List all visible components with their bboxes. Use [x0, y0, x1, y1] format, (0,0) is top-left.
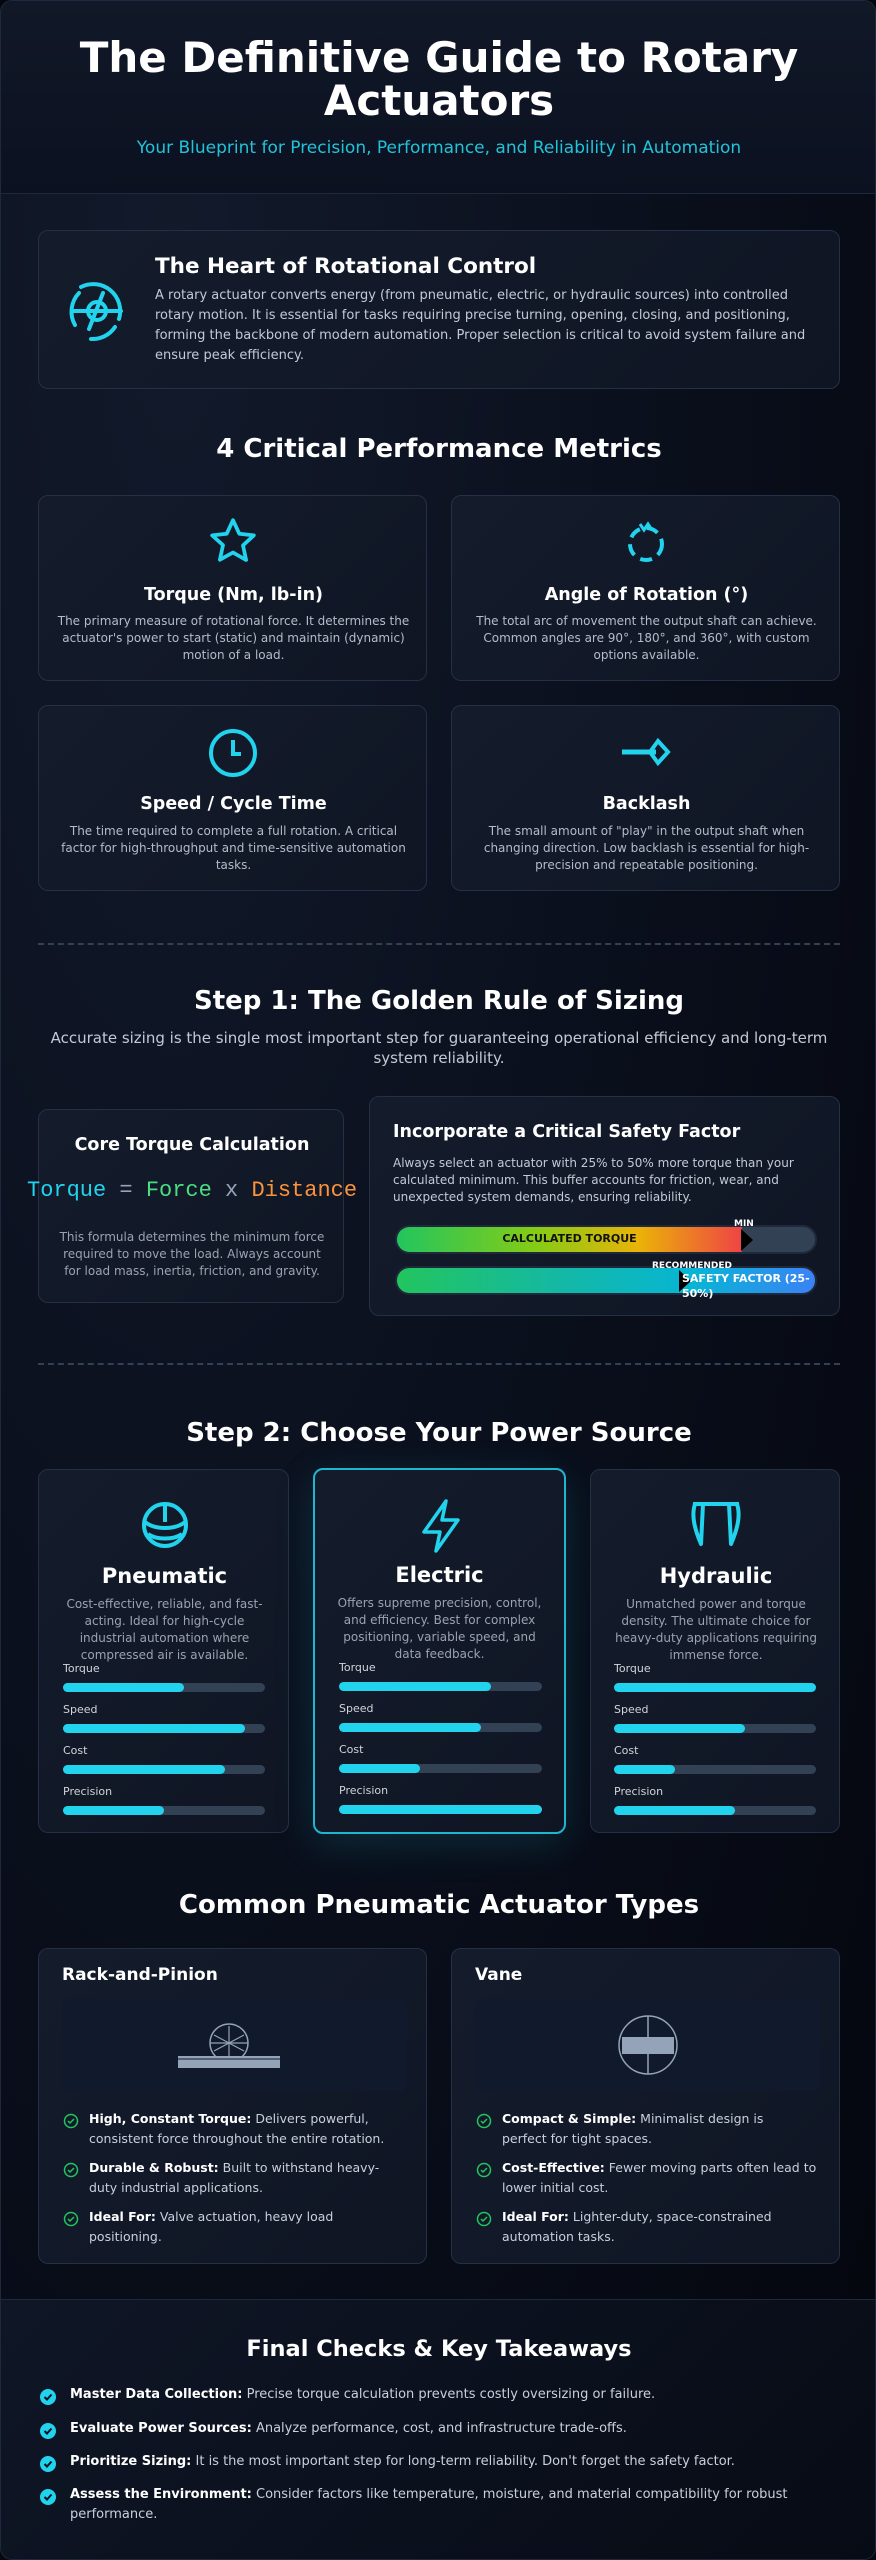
- ratings: Speed: [614, 1703, 648, 1716]
- title: Torque (Nm, lb-in): [144, 585, 323, 605]
- power card: pneumatic: [38, 1469, 289, 1833]
- description: The small amount of "play" in the output shaft when changing direction. Low backlash is essential for high-precision and repeatable positioning.: [484, 824, 809, 872]
- takeaways list: Assess the Environment: Consider factors like temperature, moisture, and material compatibility for robust performance.: [70, 2487, 788, 2522]
- description: Always select an actuator with 25% to 50% more torque than your calculated minimum. This buffer accounts for friction, wear, and unexpected system demands, ensuring reliability.: [393, 1156, 794, 1204]
- icon: clock: [209, 729, 257, 777]
- benefits list: [64, 2111, 384, 2244]
- title: Core Torque Calculation: [75, 1135, 309, 1155]
- benefits list: High, Constant Torque: Delivers powerful, consistent force throughout the entire rotation.: [89, 2111, 384, 2146]
- ratings: Precision: [63, 1785, 112, 1798]
- heading: metrics: 4 Critical Performance Metrics: [216, 434, 662, 464]
- bar: calculated torque: CALCULATED TORQUE: [502, 1232, 637, 1245]
- ratings: Cost: [614, 1744, 638, 1757]
- description: The primary measure of rotational force. It determines the actuator's power to start (static) and maintain (dynamic) motion of a load.: [58, 614, 409, 662]
- ratings: Torque: [63, 1662, 100, 1675]
- diagram: rack and pinion: [62, 1999, 407, 2091]
- ratings: Cost: [339, 1743, 363, 1756]
- description: The total arc of movement the output shaft can achieve. Common angles are 90°, 180°, and 360°, with custom options available.: [476, 614, 817, 662]
- description: This formula determines the minimum force required to move the load. Always account for load mass, inertia, friction, and gravity.: [60, 1230, 324, 1278]
- benefits list: Ideal For: Valve actuation, heavy load positioning.: [89, 2209, 333, 2244]
- title: The Definitive Guide to Rotary: [80, 33, 798, 82]
- heading: step 1: Step 1: The Golden Rule of Sizing: [194, 986, 684, 1016]
- heading: Final Checks & Key Takeaways: [246, 2336, 632, 2362]
- icon: rotation: [628, 521, 664, 562]
- takeaways list: Master Data Collection: Precise torque calculation prevents costly oversizing or failure.: [70, 2387, 655, 2402]
- title: Backlash: [603, 794, 690, 814]
- bar: safety factor: RECOMMENDED: [652, 1261, 732, 1271]
- intro text: A rotary actuator converts energy (from pneumatic, electric, or hydraulic sources) into controlled rotary motion. It is essential for tasks requiring precise turning, opening, closing, and positioning, forming the backbone of modern automation. Proper selection is critical to avoid system failure and ensure peak efficiency.: [155, 288, 805, 363]
- benefits list: Compact & Simple: Minimalist design is perfect for tight spaces.: [502, 2111, 763, 2146]
- title: Speed / Cycle Time: [140, 794, 327, 814]
- bar: calculated torque: [395, 1225, 817, 1254]
- step 1 description: Accurate sizing is the single most important step for guaranteeing operational efficiency and long-term system reliability.: [51, 1029, 827, 1067]
- icon: lightning: [422, 1499, 460, 1553]
- ratings: Speed: [339, 1702, 373, 1715]
- title: Hydraulic: [660, 1564, 772, 1588]
- icon: backlash: [622, 738, 671, 766]
- heading: pneumatic types: Common Pneumatic Actuator Types: [179, 1890, 699, 1920]
- icon: pneumatic: [142, 1502, 188, 1548]
- takeaways list: [40, 2387, 788, 2522]
- subtitle: Your Blueprint for Precision, Performance, and Reliability in Automation: [137, 138, 741, 158]
- metric card: torque: [38, 495, 427, 681]
- description: Cost-effective, reliable, and fast-acting. Ideal for high-cycle industrial automation where compressed air is available.: [66, 1597, 263, 1662]
- ratings: [338, 1661, 542, 1814]
- ratings: [62, 1662, 265, 1815]
- ratings: [614, 1662, 816, 1815]
- ratings: Speed: [63, 1703, 97, 1716]
- description: Unmatched power and torque density. The ultimate choice for heavy-duty applications requiring immense force.: [615, 1597, 817, 1662]
- title: [80, 33, 798, 125]
- ratings: Torque: [339, 1661, 376, 1674]
- metric card: angle: [451, 495, 840, 681]
- type card: rack and pinion: [38, 1948, 427, 2264]
- title: Rack-and-Pinion: [62, 1965, 218, 1985]
- title: Incorporate a Critical Safety Factor: [393, 1122, 740, 1142]
- heading: step 2: Step 2: Choose Your Power Source: [186, 1418, 692, 1448]
- benefits list: Durable & Robust: Built to withstand heavy-duty industrial applications.: [89, 2160, 379, 2195]
- title: Angle of Rotation (°): [545, 585, 748, 605]
- takeaways list: Evaluate Power Sources: Analyze performance, cost, and infrastructure trade-offs.: [70, 2421, 627, 2436]
- benefits list: [476, 2111, 816, 2244]
- takeaways list: Prioritize Sizing: It is the most important step for long-term reliability. Don't forget the safety factor.: [70, 2454, 735, 2469]
- icon: rotary: [70, 282, 123, 341]
- diagram: vane: [475, 1999, 820, 2091]
- final takeaways section: [1, 2299, 876, 2560]
- safety factor card: [369, 1096, 840, 1316]
- icon: hydraulic: [691, 1502, 741, 1546]
- intro card: [38, 230, 840, 389]
- title: Vane: [475, 1965, 522, 1985]
- core torque card: [38, 1109, 344, 1303]
- ratings: Cost: [63, 1744, 87, 1757]
- description: The time required to complete a full rotation. A critical factor for high-throughput and time-sensitive automation tasks.: [61, 824, 406, 872]
- type card: vane: [451, 1948, 840, 2264]
- title: Electric: [395, 1563, 484, 1587]
- icon: star: [210, 518, 256, 562]
- benefits list: Cost-Effective: Fewer moving parts often lead to lower initial cost.: [502, 2160, 816, 2195]
- safety factor card: MIN: [734, 1219, 754, 1229]
- ratings: Precision: [339, 1784, 388, 1797]
- description: Offers supreme precision, control, and efficiency. Best for complex positioning, variable speed, and data feedback.: [338, 1596, 541, 1661]
- intro title: The Heart of Rotational Control: [155, 254, 536, 279]
- power card: electric (highlighted): [313, 1468, 566, 1834]
- ratings: Torque: [614, 1662, 651, 1675]
- bar: safety factor: [395, 1266, 817, 1295]
- header section: [1, 1, 876, 194]
- power card: hydraulic: [590, 1469, 840, 1833]
- metric card: backlash: [451, 705, 840, 891]
- ratings: Precision: [614, 1785, 663, 1798]
- title: Pneumatic: [102, 1564, 227, 1588]
- title: Actuators: [324, 76, 554, 125]
- bar: safety factor: SAFETY FACTOR (25-50%): [682, 1272, 810, 1300]
- benefits list: Ideal For: Lighter-duty, space-constrained automation tasks.: [502, 2209, 772, 2244]
- formula: Torque = Force x Distance: [27, 1178, 357, 1203]
- metric card: speed: [38, 705, 427, 891]
